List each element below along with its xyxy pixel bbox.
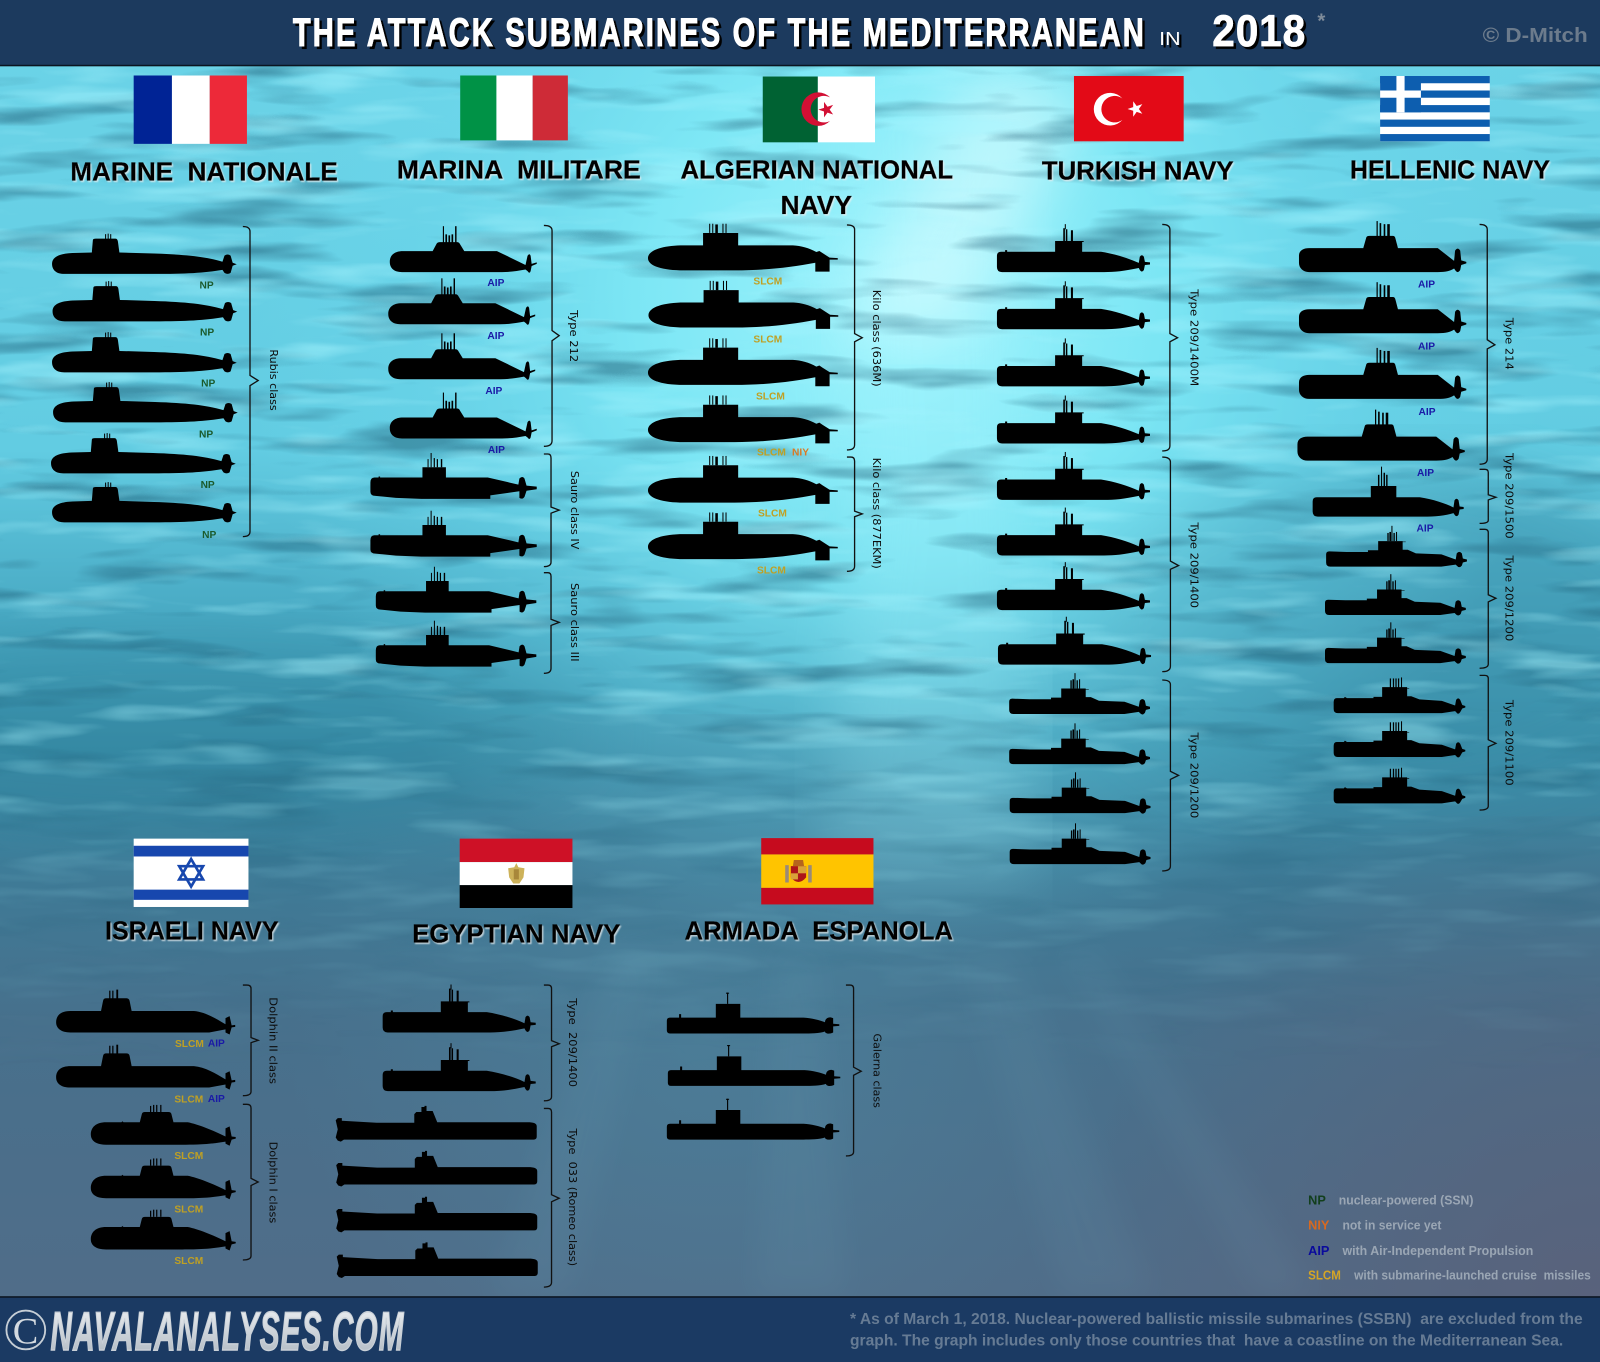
Dolphin I class submarines: SLCM: [174, 1256, 203, 1267]
Rubis class submarines: NP: [202, 530, 216, 541]
bracket: Type 209/1400: [544, 985, 577, 1101]
top banner: [0, 0, 1600, 66]
bracket: Rubis class: [243, 226, 278, 537]
bracket: Dolphin II class: Dolphin II class: [266, 997, 277, 1084]
bracket: Type 209/1200: Type 209/1200: [1187, 731, 1198, 818]
logo: navalanalyses.com: C: [13, 1311, 38, 1352]
bracket: Type 033 Romeo class: Type 033 (Romeo class): [566, 1127, 577, 1266]
heading: Marina Militare: MARINA MILITARE: [397, 157, 641, 185]
heading: Algerian National Navy: [681, 157, 953, 220]
bracket: Type 209/1500: Type 209/1500: [1503, 452, 1514, 539]
flag: France: [134, 75, 247, 144]
Galerna class submarines: [667, 993, 840, 1140]
flag: Israel: [134, 839, 248, 907]
footnote: * As of March 1, 2018. Nuclear-powered ballistic missile submarines (SSBN) are excluded from the: [850, 1311, 1583, 1328]
bracket: Rubis class: Rubis class: [267, 349, 278, 411]
Type 214 submarines: AIP: [1419, 407, 1436, 418]
bracket: Sauro class III: [544, 573, 579, 673]
Type 033 Romeo class submarines: [336, 1106, 538, 1278]
bracket: Kilo class 636M: Kilo class (636M): [870, 290, 881, 387]
Sauro class IV submarines: [370, 453, 537, 557]
legend: SLCM: [1308, 1267, 1341, 1282]
Dolphin I class submarines: SLCM: [174, 1205, 203, 1216]
heading: Armada Espanola: ARMADA ESPANOLA: [685, 918, 953, 946]
flag: Algeria: [763, 77, 875, 142]
heading: Marine Nationale: MARINE NATIONALE: [70, 159, 338, 187]
heading: Egyptian Navy: EGYPTIAN NAVY: [412, 921, 620, 949]
bracket: Kilo class 877EKM: Kilo class (877EKM): [870, 458, 881, 569]
legend: with submarine-launched cruise missiles: [1353, 1267, 1591, 1282]
bracket: Sauro class IV: Sauro class IV: [568, 471, 579, 549]
Type 212 submarines: AIP: [487, 278, 505, 289]
Type 212 submarines: AIP: [488, 445, 505, 456]
footnote: graph. The graph includes only those countries that have a coastline on the Mediterranean Sea.: [850, 1333, 1563, 1350]
bracket: Galerna class: [846, 985, 881, 1156]
logo: navalanalyses.com: [6, 1300, 405, 1362]
bracket: Dolphin I class: [243, 1104, 277, 1260]
heading: Israeli Navy: ISRAELI NAVY: [105, 918, 279, 946]
Kilo class 636M submarines: SLCM: [757, 448, 786, 459]
bracket: Dolphin I class: Dolphin I class: [266, 1142, 277, 1223]
bracket: Kilo class 636M: [847, 225, 881, 450]
bracket: Type 209/1400: [1162, 457, 1198, 672]
title: IN: [1159, 28, 1181, 49]
bracket: Dolphin II class: [243, 985, 277, 1096]
title asterisk: *: [1317, 11, 1325, 33]
flag: Egypt: [460, 839, 572, 908]
legend: NIY: [1308, 1217, 1330, 1232]
panel: Turkish Navy: [997, 76, 1234, 871]
bracket: Type 209/1200: [1480, 529, 1514, 668]
Type 209/1400 submarines: [997, 452, 1151, 665]
legend: with Air-Independent Propulsion: [1341, 1243, 1533, 1258]
bracket: Type 209/1100: Type 209/1100: [1503, 699, 1514, 786]
Rubis class submarines: [51, 234, 238, 541]
Dolphin II class submarines: SLCM: [175, 1039, 204, 1050]
Type 214 submarines: AIP: [1418, 341, 1435, 352]
legend: nuclear-powered (SSN): [1339, 1192, 1473, 1207]
heading: Algerian National Navy: NAVY: [781, 192, 852, 220]
Type 209/1400 submarines: [383, 985, 536, 1091]
bracket: Type 209/1400M: Type 209/1400M: [1187, 288, 1198, 386]
Type 212 submarines: [388, 226, 537, 456]
bracket: Type 214: Type 214: [1503, 317, 1514, 370]
Rubis class submarines: NP: [200, 281, 214, 292]
bracket: Type 209/1500: [1480, 452, 1514, 539]
panel: Israeli Navy: [56, 839, 279, 1267]
Kilo class 636M submarines: NIY: [792, 448, 809, 459]
bracket: Type 209/1200: Type 209/1200: [1503, 554, 1514, 641]
Type 209/1200 submarines: [1009, 673, 1151, 865]
bracket: Type 209/1100: [1480, 675, 1514, 810]
panel: Marina Militare: [370, 75, 641, 673]
Dolphin II class submarines: SLCM: [174, 1094, 203, 1105]
Dolphin II class submarines: [56, 990, 235, 1105]
Kilo class 877EKM submarines: [648, 456, 838, 576]
heading: Algerian National Navy: ALGERIAN NATIONAL: [681, 157, 953, 185]
Dolphin II class submarines: AIP: [208, 1039, 225, 1050]
bracket: Type 209/1400: Type 209/1400: [1187, 521, 1198, 608]
legend: NP: [1308, 1192, 1326, 1207]
Kilo class 636M submarines: SLCM: [753, 334, 782, 345]
Type 214 submarines: AIP: [1417, 468, 1434, 479]
heading: Turkish Navy: TURKISH NAVY: [1042, 158, 1234, 186]
flag: Spain: [761, 838, 873, 904]
legend: not in service yet: [1342, 1217, 1442, 1232]
panel: Marine Nationale: [51, 75, 338, 541]
Type 209/1200 submarines: [1325, 526, 1467, 664]
flag: Italy: [460, 75, 568, 140]
title: THE ATTACK SUBMARINES OF THE MEDITERRANEAN: [293, 11, 1146, 55]
Rubis class submarines: NP: [201, 379, 215, 390]
footnote: [850, 1311, 1583, 1350]
panel: Hellenic Navy: [1297, 76, 1550, 810]
panel: Armada Espanola: [667, 838, 953, 1156]
Type 214 submarines: [1297, 221, 1466, 479]
Type 209/1500 submarine: AIP: [1417, 524, 1434, 535]
flag: Greece: [1380, 76, 1490, 141]
legend: [1308, 1192, 1591, 1282]
bracket: Type 209/1400: Type 209/1400: [566, 997, 577, 1087]
Type 212 submarines: AIP: [487, 331, 505, 342]
Kilo class 636M submarines: SLCM: [753, 277, 782, 288]
Rubis class submarines: NP: [199, 430, 213, 441]
Kilo class 636M submarines: [648, 224, 838, 459]
Kilo class 877EKM submarines: SLCM: [757, 565, 786, 576]
flag: Turkey: [1074, 76, 1184, 141]
Type 212 submarines: AIP: [485, 386, 503, 397]
panel: Algerian National Navy: [648, 77, 953, 576]
heading: Hellenic Navy: HELLENIC NAVY: [1350, 157, 1550, 185]
Sauro class III submarines: [376, 567, 536, 667]
copyright credit: © D-Mitch: [1483, 25, 1588, 47]
panel: Egyptian Navy: [336, 839, 620, 1287]
legend: AIP: [1308, 1243, 1330, 1258]
bracket: Type 212: Type 212: [567, 309, 578, 362]
bracket: Type 212: [544, 225, 578, 446]
bracket: Sauro class III: Sauro class III: [568, 583, 579, 662]
Type 209/1100 submarines: [1334, 677, 1465, 804]
bracket: Type 209/1200: [1162, 680, 1198, 871]
bracket: Sauro class IV: [544, 454, 579, 567]
logo: navalanalyses.com: NAVALANALYSES.COM: [51, 1300, 405, 1362]
Type 209/1400M submarines: [997, 224, 1150, 443]
Type 209/1500 submarine: [1313, 467, 1464, 535]
Rubis class submarines: NP: [201, 480, 215, 491]
bracket: Type 209/1400M: [1162, 224, 1198, 451]
bracket: Kilo class 877EKM: [847, 457, 881, 571]
Type 214 submarines: AIP: [1418, 280, 1435, 291]
bottom banner: [0, 1296, 1600, 1362]
Dolphin II class submarines: AIP: [208, 1094, 225, 1105]
bracket: Type 214: [1480, 224, 1514, 464]
title: 2018: [1212, 5, 1306, 56]
bracket: Galerna class: Galerna class: [870, 1033, 881, 1108]
bracket: Type 033 Romeo class: [544, 1108, 577, 1287]
Dolphin I class submarines: SLCM: [174, 1151, 203, 1162]
Dolphin I class submarines: [91, 1105, 236, 1267]
Kilo class 636M submarines: SLCM: [756, 391, 785, 402]
Kilo class 877EKM submarines: SLCM: [758, 509, 787, 520]
Rubis class submarines: NP: [200, 328, 214, 339]
